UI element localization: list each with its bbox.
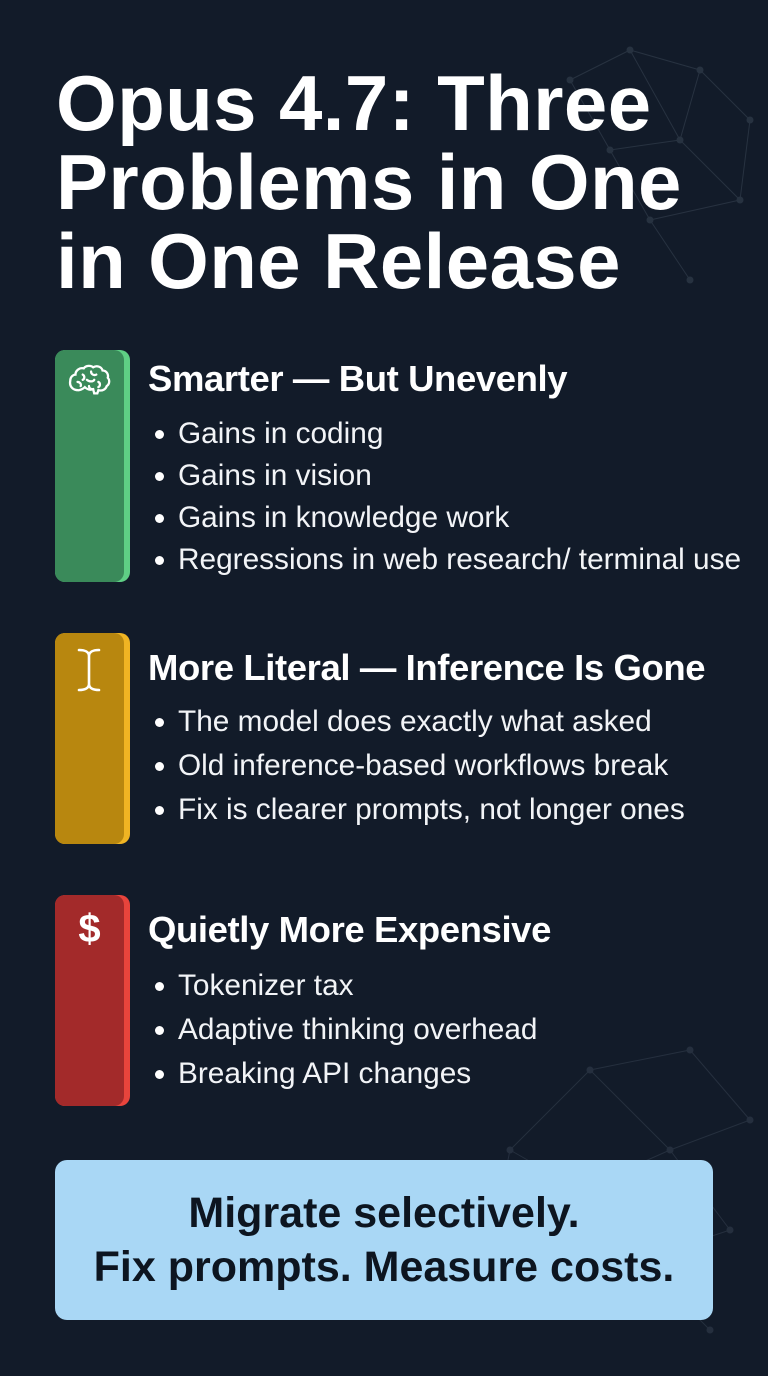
bullets: Gains in coding — [178, 417, 383, 450]
panel: expensive — [55, 895, 551, 1106]
callout: takeaway — [55, 1160, 713, 1320]
bullets — [155, 969, 537, 1090]
heading: Quietly More Expensive — [148, 909, 551, 950]
decorative network bottom right — [506, 1046, 754, 1334]
icon: dollar: $ — [78, 907, 101, 951]
bullets: Gains in vision — [178, 459, 372, 492]
callout: takeaway: Migrate selectively. — [188, 1189, 580, 1237]
title — [56, 59, 682, 305]
icon: brain — [68, 364, 110, 394]
green bar with brain icon — [55, 350, 130, 582]
bullets: Breaking API changes — [178, 1057, 471, 1090]
heading: Smarter — But Unevenly — [148, 358, 567, 399]
bullets: Gains in knowledge work — [178, 501, 509, 534]
heading: More Literal — Inference Is Gone — [148, 647, 705, 688]
bullets: Fix is clearer prompts, not longer ones — [178, 793, 685, 826]
callout: takeaway: Fix prompts. Measure costs. — [94, 1243, 674, 1291]
panel: smarter — [55, 350, 741, 582]
title: Opus 4.7: Three — [56, 59, 652, 147]
bullets — [155, 705, 685, 826]
icon: text cursor — [78, 648, 100, 692]
yellow bar with cursor icon — [55, 633, 130, 844]
bullets: The model does exactly what asked — [178, 705, 652, 738]
bullets — [155, 417, 741, 576]
title: in One Release — [56, 217, 621, 305]
bullets: Old inference-based workflows break — [178, 749, 668, 782]
bullets: Tokenizer tax — [178, 969, 354, 1002]
red bar with dollar icon — [55, 895, 130, 1106]
decorative network top right — [566, 46, 754, 284]
bullets: Adaptive thinking overhead — [178, 1013, 537, 1046]
title: Problems in One — [56, 138, 682, 226]
bullets: Regressions in web research/ terminal use — [178, 543, 741, 576]
panel: more literal — [55, 633, 705, 844]
